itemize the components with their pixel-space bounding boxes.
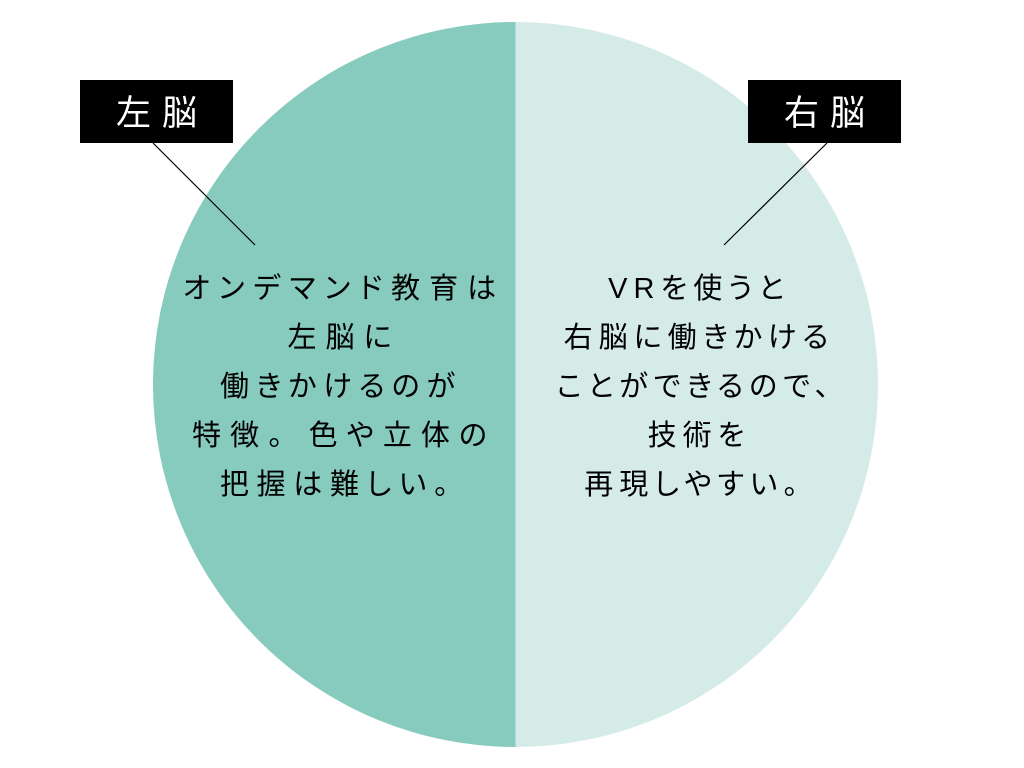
text: right description: 再現しやすい。: [584, 469, 804, 501]
text: left description: 左脳に: [288, 322, 400, 354]
left half: left brain: [153, 22, 516, 747]
right half: right brain: [516, 22, 878, 747]
text: right description: 右脳に働きかける: [564, 322, 834, 354]
text: left description: 働きかけるのが: [220, 371, 462, 403]
text: left description: 把握は難しい。: [220, 469, 456, 501]
text: right description: [557, 273, 835, 501]
text: right description: ことができるので、: [557, 371, 835, 403]
label: right brain: [748, 80, 901, 143]
leader line: left: [153, 143, 255, 245]
label: left brain: 左脳: [116, 94, 208, 133]
text: right description: 技術を: [648, 420, 750, 452]
leader line: right: [724, 143, 827, 245]
text: left description: [183, 273, 505, 501]
text: left description: 特徴。 色や立体の: [192, 420, 496, 452]
label: left brain: [80, 80, 233, 143]
text: right description: VRを使うと: [608, 273, 790, 305]
text: left description: オンデマンド教育は: [183, 273, 505, 305]
label: right brain: 右脳: [784, 94, 876, 133]
